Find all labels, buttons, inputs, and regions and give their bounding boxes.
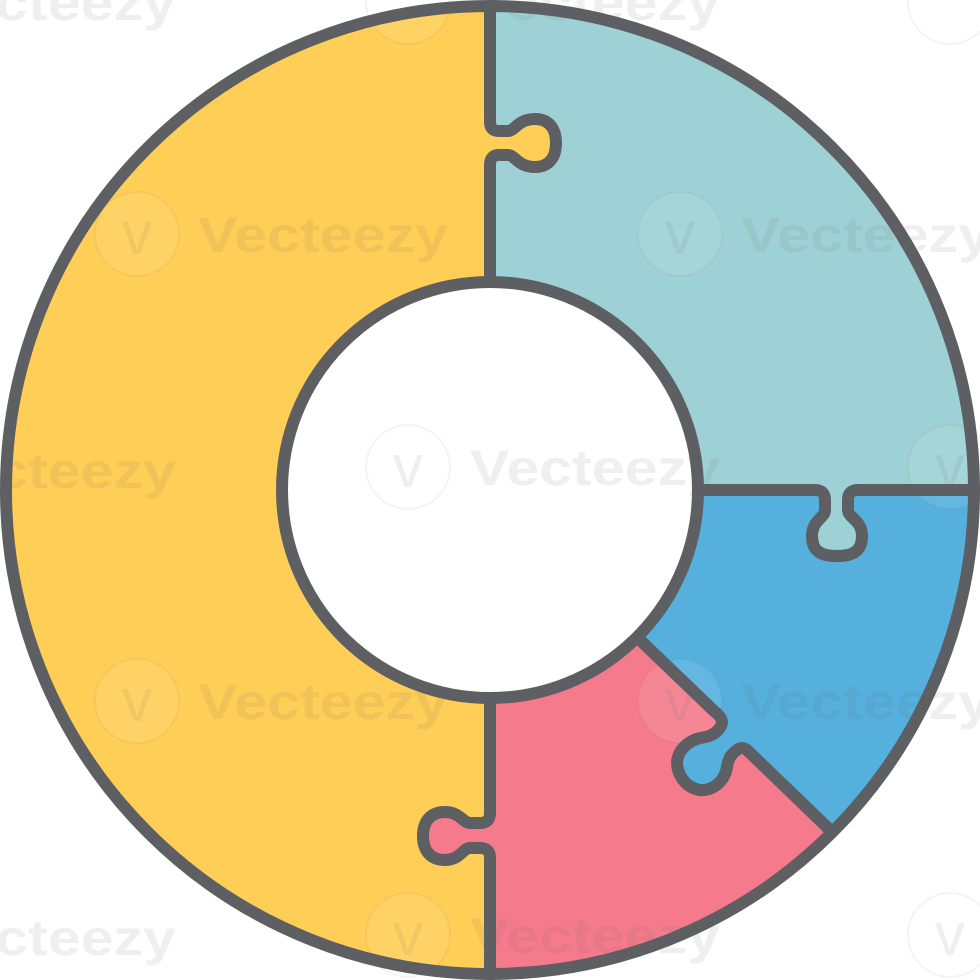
puzzle joint: right [698,490,974,556]
segment: yellow half [6,6,556,974]
watermark pattern: v [935,433,965,500]
watermark pattern: Vecteezy [198,674,448,730]
watermark pattern: v [935,901,965,968]
segment: teal quarter [490,6,974,556]
watermark pattern: v [122,667,152,734]
watermark pattern: v [393,901,423,968]
puzzle joint: diagonal [640,640,830,830]
watermark pattern: v [393,433,423,500]
puzzle joint: bottom [423,702,490,974]
inner ring [282,282,698,698]
watermark pattern: Vecteezy [198,207,448,263]
watermark pattern: Vecteezy [741,674,980,730]
centre hole [282,282,698,698]
watermark pattern: v [665,667,695,734]
watermark pattern: Vecteezy [470,440,720,496]
watermark pattern: Vecteezy [741,207,980,263]
watermark pattern: v [122,200,152,267]
puzzle joint: top [490,6,556,278]
watermark pattern: Vecteezy [470,908,720,964]
segment: blue slice [490,490,974,832]
watermark pattern: v [665,200,695,267]
segment: pink slice [423,490,832,974]
